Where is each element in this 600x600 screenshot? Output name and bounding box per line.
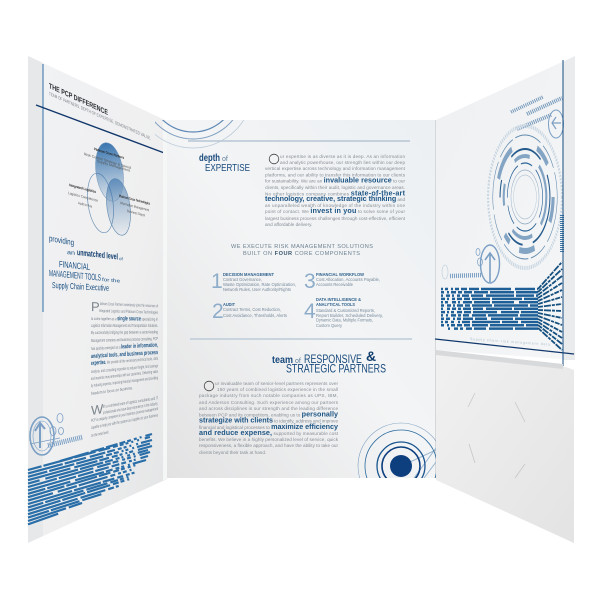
icon: right arrow emblem lower [442, 245, 500, 283]
left panel body copy: capable to help you with the system as it applies to your business [91, 412, 158, 430]
right perspective wall stripes [538, 262, 562, 350]
venn diagram: Logistics Competence [68, 191, 98, 203]
component 1: decision management: 1 [211, 270, 223, 293]
expertise copy: clients, specifically within their audit, logistic and governance areas. [265, 185, 405, 190]
team copy [199, 381, 339, 455]
right navy vertical rule [562, 60, 564, 366]
team copy: ur invaluable team of senior-level partners represents over [215, 381, 338, 386]
component 3: financial workflow: Cost Allocation, Accounts Payable, [316, 277, 380, 282]
expertise copy [265, 154, 406, 227]
component 2: audit: Cost Avoidance, Thresholds, Alerts [223, 313, 288, 318]
bottom concentric target graphic [358, 422, 436, 478]
left panel body copy: freedom to focus on business. [91, 385, 133, 396]
team copy: and Anderson Consulting. Such experience among our partners [199, 400, 339, 405]
component 4: data intelligence: Dynamic Data, Multiple Formats, [316, 318, 373, 322]
headline: providing an unmatched level: unmatched level [77, 247, 118, 262]
component 2: audit: Contract Terms, Cost Reduction, [223, 307, 281, 312]
subheading: TEAM OF PARTNERS. DEPTH OF EXPERTISE. DEMONSTRATED VALUE. [49, 91, 151, 142]
expertise copy: vertical expertise across technology and information management [265, 166, 406, 171]
headline: providing an unmatched level [49, 233, 123, 293]
left panel body copy: ith a combined team of logistics consultants and IT [103, 395, 158, 409]
left panel body copy: P [91, 299, 100, 314]
venn diagram: Audit to Pay [78, 201, 92, 209]
four core components heading [231, 244, 373, 257]
component 3: financial workflow: 3 [304, 270, 316, 293]
left panel body copy: analysis, and consulting expertise to reduce freight, find savings [91, 363, 158, 374]
heading: team of responsive and strategic partners [272, 348, 386, 376]
headline: providing an unmatched level: providing [49, 233, 74, 248]
heading: team of responsive and strategic partners: of [295, 358, 301, 365]
right navy horizontal rule [435, 339, 574, 354]
left panel body copy: Management company and business process consulting, PCP [91, 336, 158, 343]
heading: depth of expertise: depth [199, 153, 220, 164]
top decorative ring arcs [155, 120, 244, 148]
icon: left arrow emblem [30, 414, 83, 455]
left panel body copy: to come together as a single source specializing in [91, 316, 158, 323]
expertise copy: and affordable delivery. [265, 222, 312, 227]
team copy: benefits. We believe in a highly personalized level of service, quick [199, 437, 339, 442]
left panel body copy: latinum Cross Partners seamlessly joins the resources of [100, 301, 158, 308]
left panel body copy: analytical tools, and business process [91, 350, 158, 360]
faint caption: Supply chain risk management data [470, 337, 550, 347]
pocket business card slits [468, 393, 525, 478]
expertise copy: point of contact. We invest in you to solve some of your [265, 206, 405, 215]
expertise copy: technology, creative, strategic thinking and [265, 194, 405, 203]
heading: team of responsive and strategic partners: & [366, 348, 376, 364]
left panel body copy: Integrated Logistics and Platinum Cross Technologies [99, 308, 158, 315]
concentric data ring graphic [488, 126, 562, 268]
headline: providing an unmatched level: an [67, 250, 75, 257]
expertise copy: largest business process challenges through cost-effective, efficient [265, 216, 406, 221]
team copy: between PCP and its competitors, enabling us to personally [199, 410, 338, 418]
left panel body copy: by reducing expense, improving financial management and providing [91, 375, 158, 388]
icon: right arrow emblem top [548, 110, 564, 138]
component 2: audit [212, 300, 288, 323]
left panel body copy: has quickly emerged as a leader in information, [91, 343, 158, 352]
headline: providing an unmatched level: MANAGEMENT TOOLS [49, 268, 101, 283]
component 1: decision management: Waste Optimization, Rate Optimization, [223, 282, 296, 287]
venn diagram: Risk Control Strategy & Spend [84, 152, 131, 170]
left panel body copy: expertise. We provide all the necessary technical tools, data [91, 356, 158, 367]
team copy: clients beyond their task at hand. [199, 450, 266, 455]
lower divider [190, 338, 412, 340]
expertise copy: an unparalleled wealth of knowledge of the industry within one [265, 203, 405, 208]
component 4: data intelligence: ANALYTICAL TOOLS [316, 302, 355, 307]
headline: providing an unmatched level: Supply Chain Executive [52, 280, 109, 293]
component 2: audit: AUDIT [223, 302, 235, 307]
left panel body copy: on the next level. [91, 429, 109, 438]
venn diagram: Supply Management [97, 159, 130, 173]
headline: providing an unmatched level: FINANCIAL [59, 259, 90, 272]
heading: team of responsive and strategic partners: STRATEGIC PARTNERS [286, 364, 386, 376]
left panel body copy: Logistics Information Management and Transportation Solutions. [91, 323, 158, 328]
panel: right pocket [436, 350, 574, 543]
left data stripes [28, 434, 152, 524]
venn diagram [68, 141, 150, 237]
four core components heading: BUILT ON FOUR CORE COMPONENTS [243, 251, 360, 257]
panel: left folder flap [28, 56, 167, 543]
component 4: data intelligence: Report Builder, Scheduled Delivery, [316, 313, 383, 318]
right data stripes [441, 289, 538, 329]
left panel body copy [91, 299, 158, 438]
venn diagram: Platinum Cross Partners [94, 147, 124, 160]
component 1: decision management: Contract Governance, [223, 277, 262, 282]
heading: depth of expertise: of [222, 156, 228, 163]
venn diagram: Platinum Cross Technologies [119, 194, 150, 206]
heading: depth of expertise [199, 153, 250, 174]
team copy: financial and logistical processes to maximize efficiency [199, 422, 338, 431]
left panel body copy: PCP is uniquely competent in your business process management [91, 406, 158, 423]
component 4: data intelligence [304, 297, 383, 328]
heading: depth of expertise: EXPERTISE [205, 162, 250, 174]
panel: centre folder page [155, 120, 436, 480]
left panel body copy: By successfully bridging the gap between a sector-leading [91, 329, 158, 335]
expertise copy: for sustainability. We are an invaluable resource to our [265, 176, 405, 184]
venn diagram: Business Depot [127, 209, 145, 217]
expertise copy: and analytic powerhouse, our strength lies within our deep [280, 160, 405, 165]
team copy: package industry from such notable companies as UPS, IBM, [199, 393, 338, 398]
team copy: and across disciplines is our strength and the leading difference [199, 406, 338, 411]
heading: the PCP difference: THE PCP DIFFERENCE [49, 81, 108, 117]
barcode strip [560, 215, 564, 252]
component 4: data intelligence: 4 [304, 300, 316, 323]
headline: providing an unmatched level: for the [102, 277, 120, 285]
venn diagram: Integrated Logistics [69, 183, 96, 194]
top right hatch strips [511, 97, 562, 129]
left navy diagonal rule [36, 105, 167, 154]
component 3: financial workflow: Accounts Receivable [316, 282, 353, 287]
component 1: decision management: DECISION MANAGEMENT [223, 272, 274, 277]
panel: right folder flap [435, 56, 575, 366]
left panel body copy: and maximize true partnerships with our customers. Delivering value [91, 369, 158, 381]
team copy: strategize with clients to identify, address and improve [199, 416, 338, 424]
expertise copy: platforms, and our ability to transfer this information to our clients [265, 172, 406, 178]
left panel body copy: professionals who have deep experience in the industry, [103, 401, 158, 415]
expertise copy: ur expertise is as diverse as it is deep. As an information [280, 154, 405, 159]
component 1: decision management [211, 270, 296, 293]
left vertical blue rule [42, 64, 44, 312]
component 2: audit: 2 [212, 300, 224, 323]
left panel body copy: W [91, 401, 104, 418]
component 4: data intelligence: DATA INTELLIGENCE & [316, 297, 362, 302]
four core components heading: WE EXECUTE RISK MANAGEMENT SOLUTIONS [231, 244, 373, 250]
team copy: responsiveness, a flexible approach, and have the ability to take our [199, 443, 338, 448]
heading: team of responsive and strategic partners: RESPONSIVE [304, 354, 362, 366]
top divider [188, 140, 410, 142]
component 1: decision management: Network Rules, User Authority/Rights [223, 287, 292, 292]
venn diagram: Information Management [120, 201, 149, 212]
component 4: data intelligence: Standard & Customized Reports, [316, 308, 375, 313]
team copy: 150 years of combined logistics experience in the small [217, 387, 338, 392]
component 3: financial workflow: FINANCIAL WORKFLOW [316, 272, 365, 277]
headline: providing an unmatched level: of [119, 256, 123, 261]
heading: team of responsive and strategic partners: team [272, 355, 293, 366]
component 4: data intelligence: Custom Query [316, 323, 343, 328]
team copy: and reduce expense, supported by measurable cost [199, 428, 339, 437]
component 3: financial workflow [304, 270, 380, 293]
expertise copy: No other logistics company combines state-of-the-art [265, 188, 406, 198]
